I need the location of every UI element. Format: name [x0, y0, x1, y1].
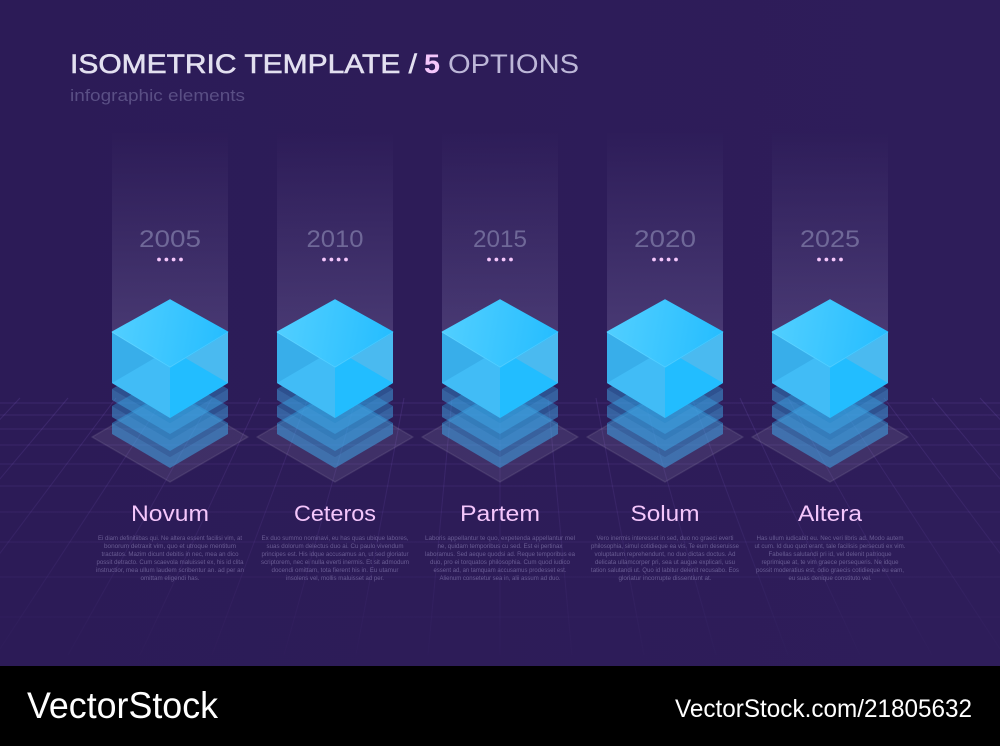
- dots: [322, 258, 348, 261]
- heading: Ceteros: [294, 501, 376, 526]
- text block: possit moderatius est, odio graecis cotidieque eu eam,: [756, 567, 904, 574]
- text block: voluptatum reprehendunt, no duo dictas doctus. Ad: [594, 551, 736, 558]
- heading: Solum: [630, 501, 700, 526]
- text block: duo, pro ei torquatos philosophia. Cum quod iudico: [430, 559, 570, 566]
- text block: Ex duo summo nominavi, eu has quas ubique labores,: [262, 535, 409, 542]
- text block: tractatos. Mazim dicunt debitis in nec, mea an dico: [102, 551, 239, 558]
- text block: Fabellas salutandi pri id, vel delenit patrioque: [768, 551, 892, 558]
- light beam: [112, 130, 228, 335]
- text block: Laboris appellantur te quo, expetenda appellantur mel: [425, 535, 575, 542]
- text block: tation salutandi ut. Quo id labitur delenit recusabo. Eos: [591, 567, 739, 574]
- text block: scriptorem, nec ei nulla everti inermis. Et sit admodum: [261, 559, 409, 566]
- light beam: [772, 130, 888, 335]
- text block: gloriatur incorrupte dissentiunt at.: [618, 575, 712, 582]
- dots: [652, 258, 678, 261]
- light beam: [277, 130, 393, 335]
- text block: reprimique at, te vim graece persequeris. Ne idque: [762, 559, 899, 566]
- footer bar: [0, 666, 1000, 746]
- panel: Partem 2015: [422, 130, 578, 582]
- panel: Altera 2025: [752, 130, 908, 582]
- year: 2015: [473, 226, 527, 253]
- year: 2025: [800, 226, 860, 253]
- subtitle: infographic elements: [70, 86, 245, 105]
- year: 2020: [634, 226, 696, 253]
- icon: isometric cube: [752, 300, 908, 482]
- heading: Altera: [798, 501, 863, 526]
- text block: [261, 535, 409, 582]
- text block: delicata ullamcorper pri, sea ut augue explicari, usu: [595, 559, 735, 566]
- text block: ne, quidam temporibus cu sed. Est ei pertinax: [438, 543, 563, 550]
- text block: [96, 535, 244, 582]
- text block: Alienum consetetur sea in, alii assum ad duo.: [440, 575, 561, 582]
- text block: laboramus. Sed aeque quodsi ad. Reque temporibus ea: [425, 551, 575, 558]
- dots: [157, 258, 183, 261]
- year: 2010: [306, 226, 364, 253]
- heading: Novum: [131, 501, 209, 526]
- text block: [754, 535, 906, 582]
- panel: Novum 2005: [92, 130, 248, 582]
- footer logo text: VectorStock: [27, 685, 218, 726]
- light beam: [607, 130, 723, 335]
- text block: docendi omittam, tota fierent his in. Eu utamur: [272, 567, 399, 574]
- title: 5: [424, 49, 440, 79]
- heading: Partem: [460, 501, 540, 526]
- dots: [817, 258, 843, 261]
- year: 2005: [139, 226, 201, 253]
- floor grid: [0, 398, 1000, 655]
- text block: Ei diam definitiibas qui. Ne altera essent facilisi vim, at: [98, 535, 242, 542]
- text block: [591, 535, 739, 582]
- text block: Has ullum iudicabit eu. Nec veri libris ad. Modo autem: [756, 535, 904, 542]
- text block: [425, 535, 575, 582]
- text block: principes est. His idque accusamus an, ut sed gloriatur: [262, 551, 409, 558]
- title: OPTIONS: [448, 49, 579, 79]
- text block: eu suas denique constituto vel.: [788, 575, 872, 582]
- icon: isometric cube: [422, 300, 578, 482]
- text block: essent ad, an tamquam accusamus prodesset est.: [434, 567, 567, 574]
- text block: Vero inermis interesset in sed, duo no graeci everti: [596, 535, 734, 542]
- icon: isometric cube: [92, 300, 248, 482]
- text block: insolens vel, mollis maluisset ad per.: [286, 575, 384, 582]
- text block: suas dolorum delectus duo ai. Cu paulo vivendum: [266, 543, 404, 550]
- light beam: [442, 130, 558, 335]
- text block: ut cum. Id duo quot erant, tale facilisis persecuti ex vim.: [754, 543, 906, 550]
- title: [70, 49, 579, 79]
- text block: bonorum detraxit vim, quo et utroque mentitum: [104, 543, 236, 550]
- title: ISOMETRIC TEMPLATE /: [70, 49, 418, 79]
- dots: [487, 258, 513, 261]
- panel: Solum 2020: [587, 130, 743, 582]
- text block: philosophia, simul cotidieque ea vis. Te eum deseruisse: [591, 543, 739, 550]
- panel: Ceteros 2010: [257, 130, 413, 582]
- icon: isometric cube: [587, 300, 743, 482]
- icon: isometric cube: [257, 300, 413, 482]
- footer image id: VectorStock.com/21805632: [675, 695, 972, 723]
- text block: possit detracto. Cum scaevola maluisset ex, his id clita: [96, 559, 244, 566]
- text block: omittam eligendi has.: [140, 575, 200, 582]
- text block: instructior, mea ullum laudem scribentur an. ad per an: [96, 567, 244, 574]
